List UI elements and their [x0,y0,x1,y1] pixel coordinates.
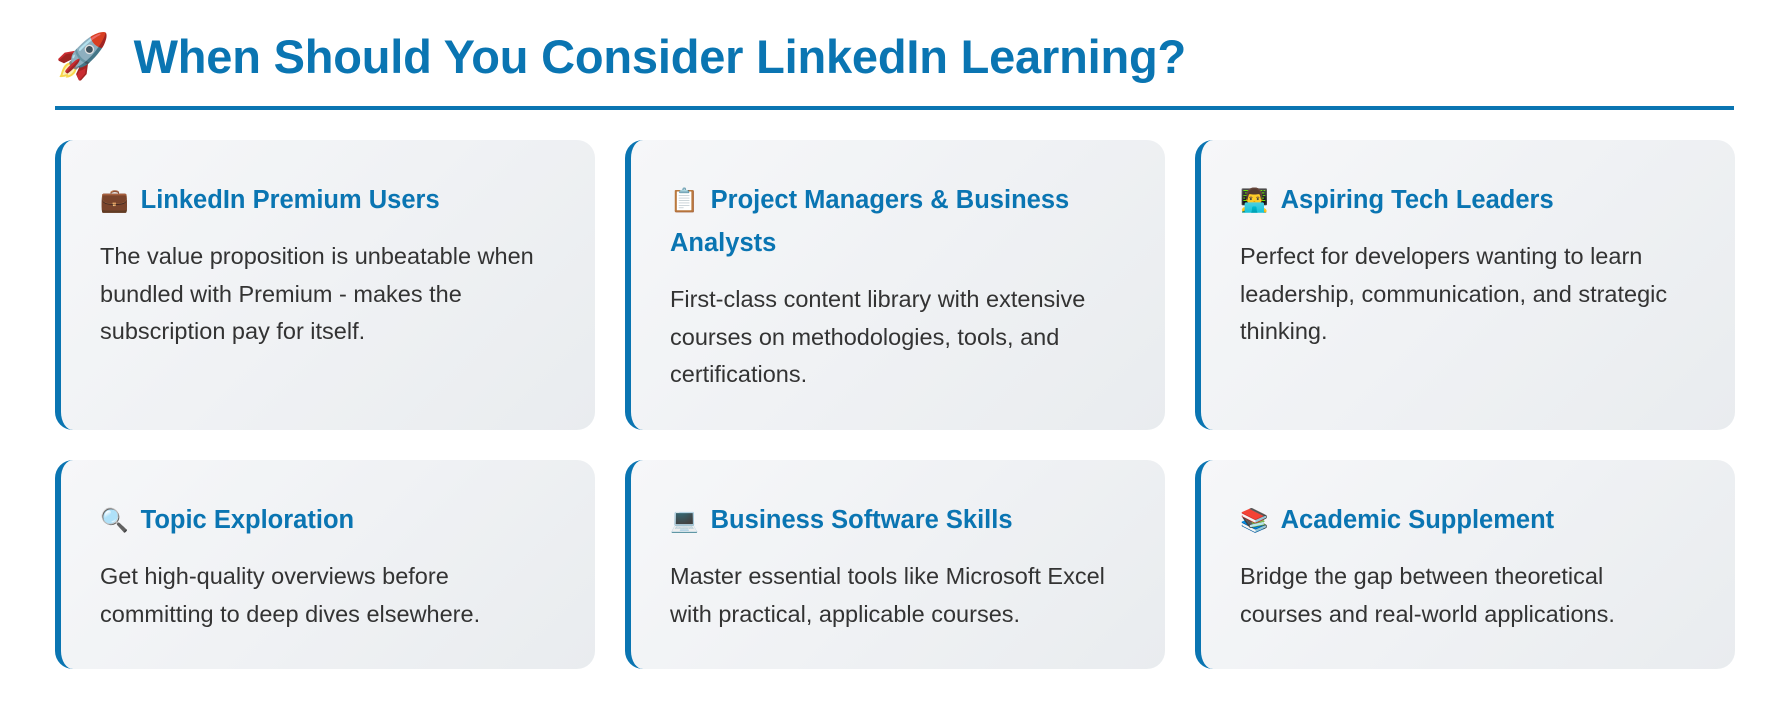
text: Master essential tools like Microsoft Excel [670,563,1105,589]
panel: Project Managers [625,140,1165,430]
text: The value proposition is unbeatable when [100,243,534,269]
heading: 📋 Project Managers & Business [670,186,1069,214]
text [1240,243,1667,344]
text: courses on methodologies, tools, and [670,324,1059,350]
heading: 📚 Academic Supplement [1240,506,1554,534]
text: Bridge the gap between theoretical [1240,563,1603,589]
text [100,563,480,627]
panel: Aspiring Tech Leaders [1195,140,1735,430]
heading: 💼 LinkedIn Premium Users [100,186,440,214]
title: 🚀 [55,32,110,81]
panel: Topic Exploration [55,460,595,669]
text: committing to deep dives elsewhere. [100,600,480,626]
text [670,563,1105,627]
title: When Should You Consider LinkedIn Learning? [134,30,1186,82]
text: Perfect for developers wanting to learn [1240,243,1642,269]
heading: 👨‍💻 Aspiring Tech Leaders [1240,186,1554,214]
heading: Analysts [670,229,776,257]
text [100,243,534,344]
panel: Business Software Skills [625,460,1165,669]
heading [670,186,1069,257]
text: with practical, applicable courses. [670,600,1020,626]
text [670,286,1085,387]
text [1240,563,1615,627]
heading: 💻 Business Software Skills [670,506,1013,534]
text: certifications. [670,361,807,387]
text: Get high-quality overviews before [100,563,449,589]
text: First-class content library with extensive [670,286,1085,312]
text: leadership, communication, and strategic [1240,280,1667,306]
heading: 🔍 Topic Exploration [100,506,354,534]
text: subscription pay for itself. [100,318,365,344]
text: courses and real-world applications. [1240,600,1615,626]
text: thinking. [1240,318,1328,344]
panel: LinkedIn Premium Users [55,140,595,430]
text: bundled with Premium - makes the [100,280,462,306]
panel: Academic Supplement [1195,460,1735,669]
